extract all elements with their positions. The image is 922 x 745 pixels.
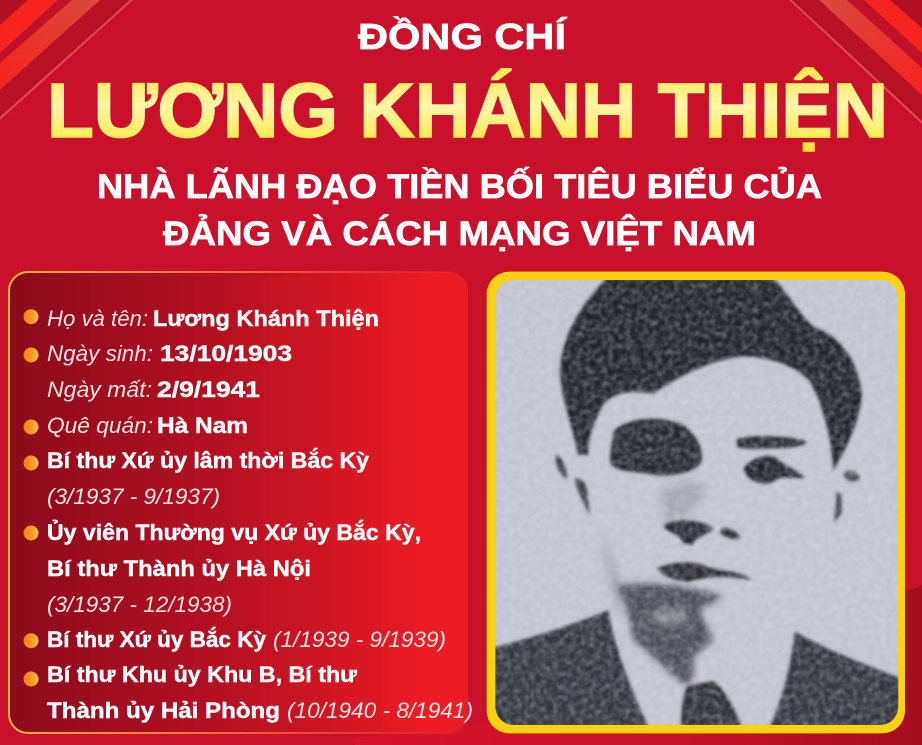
- hometown: Hà Nam: [157, 413, 248, 438]
- right brow: [737, 436, 807, 449]
- date of death: [47, 377, 260, 402]
- date of birth: 13/10/1903: [160, 341, 292, 366]
- role: standing committee member: Bí thư Thành ủy Hà Nội: [47, 556, 311, 581]
- role: zone B secretary: (10/1940 - 8/1941): [287, 698, 473, 723]
- right ear: [843, 471, 860, 481]
- dark grain: [495, 280, 898, 725]
- light grain: [495, 280, 898, 725]
- bullet markers: [24, 309, 38, 686]
- date of death: Ngày mất:: [47, 377, 152, 402]
- heading: name: LƯƠNG KHÁNH THIỆN: [47, 67, 888, 154]
- panel: biography: [9, 272, 473, 733]
- panel background: [9, 272, 468, 733]
- left ear: [555, 455, 567, 478]
- role: standing committee member: (3/1937 - 12/1938): [47, 592, 232, 617]
- suit left: [493, 610, 648, 727]
- date of birth: [47, 341, 292, 366]
- bottom swoosh: [352, 585, 922, 745]
- subtitle: [97, 167, 822, 253]
- role: zone B secretary: Thành ủy Hải Phòng: [47, 698, 280, 723]
- full name: Họ và tên:: [47, 306, 148, 331]
- hometown: [47, 413, 248, 438]
- role: acting secretary: [47, 448, 370, 509]
- photo frame: [487, 272, 905, 733]
- role: regional secretary: Bí thư Xứ ủy Bắc Kỳ: [47, 627, 267, 652]
- role: standing committee member: [47, 520, 421, 617]
- full name: Lương Khánh Thiện: [153, 306, 379, 331]
- role: standing committee member: Ủy viên Thường vụ Xứ ủy Bắc Kỳ,: [47, 520, 421, 545]
- role: acting secretary: (3/1937 - 9/1937): [47, 484, 220, 509]
- portrait photo: [487, 272, 905, 733]
- right eye: [743, 456, 805, 484]
- hair: [560, 278, 862, 472]
- hometown: Quê quán:: [47, 413, 153, 438]
- chin highlight: [652, 609, 688, 624]
- subtitle: ĐẢNG VÀ CÁCH MẠNG VIỆT NAM: [163, 215, 756, 253]
- role: regional secretary: [47, 627, 446, 652]
- date of birth: Ngày sinh:: [47, 341, 153, 366]
- top-left corner stripes: [0, 0, 133, 120]
- nose: [663, 520, 713, 545]
- neck shadow: [617, 584, 723, 684]
- role: zone B secretary: [47, 662, 473, 723]
- role: zone B secretary: Bí thư Khu ủy Khu B, Bí thư: [47, 662, 357, 687]
- portrait: [493, 278, 900, 727]
- role: regional secretary: (1/1939 - 9/1939): [273, 627, 446, 652]
- subtitle: NHÀ LÃNH ĐẠO TIỀN BỐI TIÊU BIỂU CỦA: [97, 167, 822, 206]
- top-right corner stripes: [789, 0, 922, 124]
- mouth: [657, 562, 752, 582]
- heading: Đồng chí: ĐỒNG CHÍ: [358, 15, 567, 57]
- tie: [681, 681, 742, 727]
- full name: [47, 306, 379, 331]
- left eye: [610, 419, 702, 476]
- date of death: 2/9/1941: [157, 377, 260, 402]
- suit right: [770, 632, 900, 727]
- role: acting secretary: Bí thư Xứ ủy lâm thời Bắc Kỳ: [47, 448, 370, 473]
